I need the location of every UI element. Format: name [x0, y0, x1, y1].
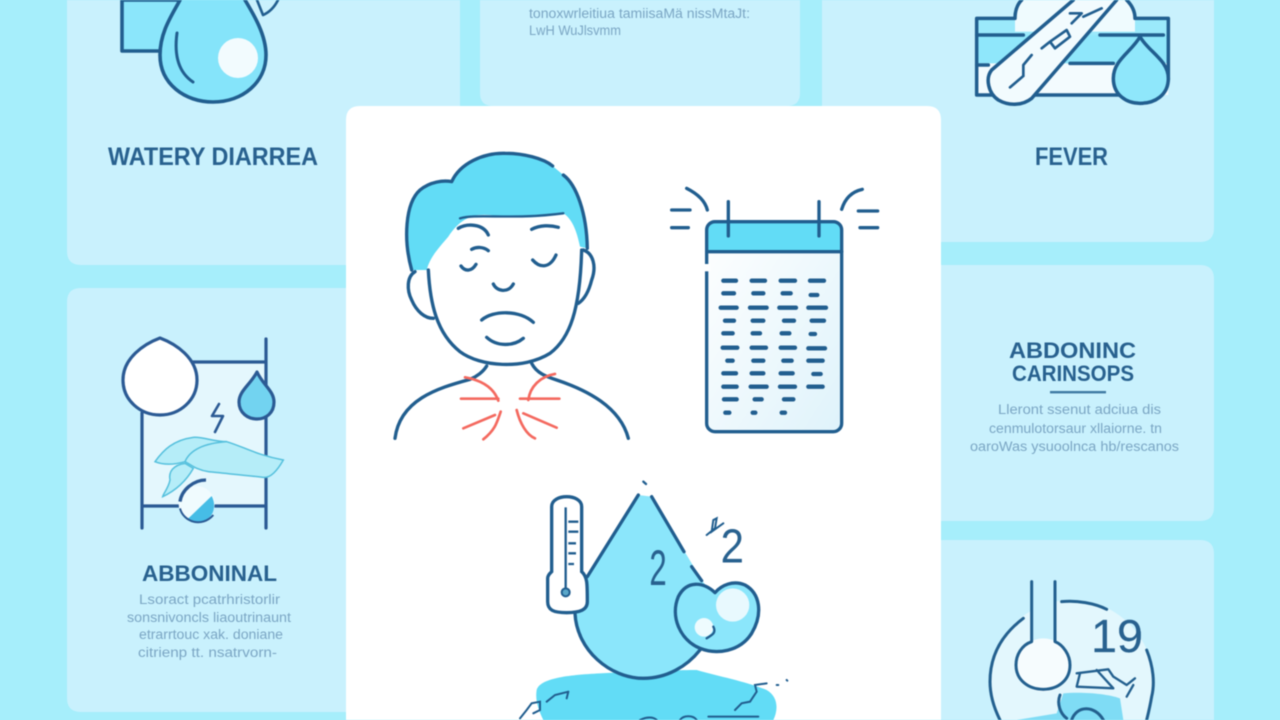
panel: central card: [346, 106, 941, 720]
icon: abdomen with drops: [123, 338, 283, 528]
text block: abdominal description: [127, 592, 291, 660]
heading: abdoninc carinsops: CARINSOPS: [1012, 361, 1134, 386]
icon: water drop, thermometer and heart: [520, 482, 787, 720]
text block: cramps description: Lleront ssenut adciua dis: [998, 402, 1161, 417]
text block: top description: tonoxwrleitiua tamiisaMä nissMtaJt:: [529, 6, 750, 21]
panel: fever: [822, 0, 1214, 242]
text block: abdominal description: Lsoract pcatrhristorlir: [139, 592, 281, 607]
number 19: 19: [1091, 610, 1143, 662]
icon: water drop with square: [122, 0, 278, 102]
icon: thermometer gauge: [990, 582, 1153, 720]
heading: watery diarrea: WATERY DIARREA: [108, 143, 318, 171]
icon: person with sore throat: [395, 153, 628, 439]
heading: abbonhal: ABBONINAL: [142, 561, 277, 586]
numbers: 2: [649, 540, 667, 596]
icon: calendar: [672, 188, 878, 432]
heading: abdoninc carinsops: [1009, 338, 1136, 386]
panel: bottom right: [930, 540, 1214, 720]
text block: cramps description: cenmulotorsaur xllaiorne. tn: [989, 421, 1162, 436]
text block: abdominal description: citrienp tt. nsatrvorn-: [138, 645, 277, 660]
text block: top description: LwH WuJlsvmm: [529, 23, 621, 38]
calendar entries: [721, 281, 826, 413]
scribble marks: [520, 518, 787, 720]
panel: watery diarrhea: [67, 0, 460, 265]
divider under heading: [1050, 391, 1106, 393]
heading: abdoninc carinsops: ABDONINC: [1009, 338, 1136, 363]
text block: abdominal description: etrarrtouc xak. doniane: [139, 627, 283, 642]
sore throat marks: [461, 374, 559, 439]
text block: cramps description: [970, 402, 1179, 454]
icon: thermometer and drop: [977, 0, 1168, 104]
icon: water drop, thermometer and heart: 2: [721, 520, 744, 574]
text block: cramps description: oaroWas ysuoolnca hb/rescanos: [970, 439, 1179, 454]
ball icon: [179, 480, 215, 523]
panel: abdominal: [67, 288, 357, 712]
thermometer: [548, 497, 587, 613]
text block: abdominal description: sonsnivoncls liaoutrinaunt: [127, 610, 291, 625]
puddle: [536, 670, 777, 720]
text block: top description: [529, 6, 750, 38]
stomach shape: [155, 437, 283, 497]
panel: abdominal cramps: [930, 265, 1214, 521]
panel: top middle: [480, 0, 800, 106]
heading: fever: FEVER: [1035, 143, 1108, 171]
